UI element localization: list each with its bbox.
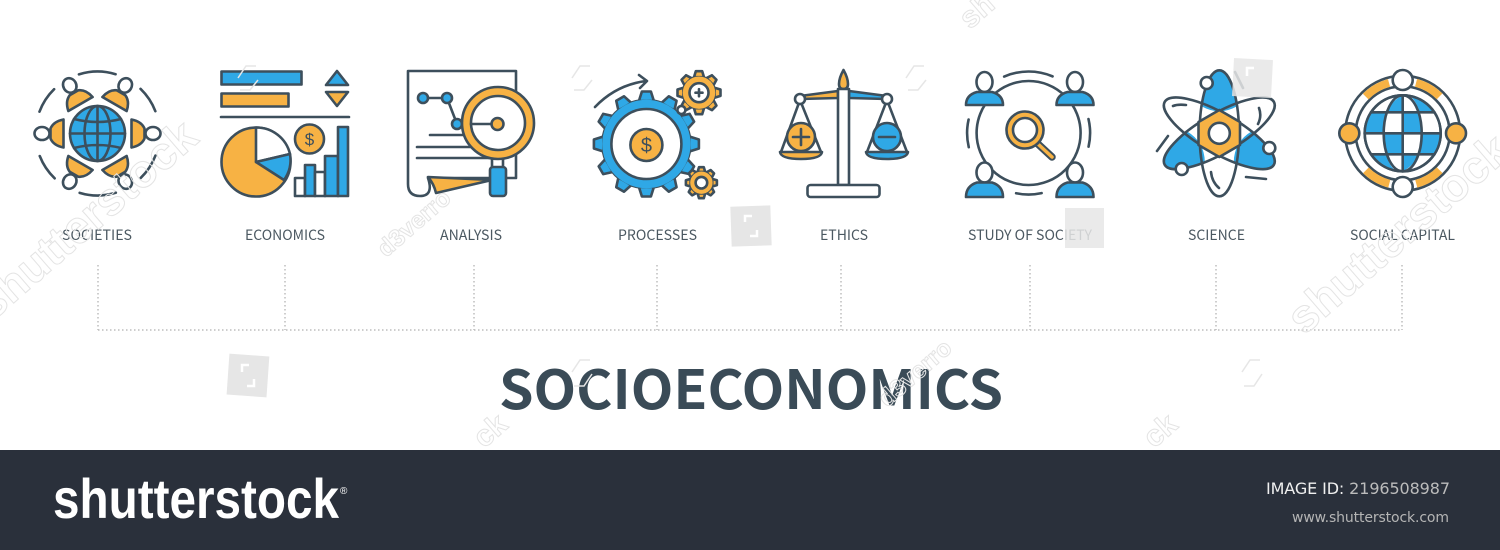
- icon: science: [1155, 70, 1284, 196]
- title: SOCIOECONOMICS: [499, 346, 1003, 425]
- label: economics: ECONOMICS: [245, 225, 325, 245]
- label: study of society: STUDY OF SOCIETY: [968, 225, 1093, 245]
- watermarks: ck: [1137, 407, 1184, 454]
- icon: economics: $: [305, 130, 315, 149]
- label: ethics: ETHICS: [820, 225, 868, 245]
- watermarks: ck: [467, 407, 514, 454]
- label: science: SCIENCE: [1188, 225, 1245, 245]
- icon: processes: [594, 71, 720, 198]
- icon: economics: [221, 71, 349, 196]
- label: processes: PROCESSES: [618, 225, 697, 245]
- dotted connector bracket: [98, 265, 1402, 330]
- footer image id: IMAGE ID: 2196508987: [1266, 479, 1450, 498]
- icon: study of society: [948, 52, 1109, 214]
- footer url: www.shutterstock.com: [1292, 510, 1449, 526]
- icon: analysis: [408, 71, 534, 196]
- watermarks: d3verro: [873, 334, 957, 413]
- icon: processes: $: [641, 135, 652, 157]
- label: societies: SOCIETIES: [62, 225, 132, 245]
- watermarks: d3verro: [372, 184, 456, 263]
- footer bar: [0, 450, 1500, 550]
- label: analysis: ANALYSIS: [440, 225, 502, 245]
- footer logo: shutterstock: [53, 467, 340, 530]
- label: social capital: SOCIAL CAPITAL: [1350, 225, 1455, 245]
- icon: societies: [20, 56, 175, 211]
- footer registered mark: ®: [340, 486, 348, 497]
- icon: ethics: [780, 70, 908, 197]
- icon: social capital: [1339, 69, 1467, 197]
